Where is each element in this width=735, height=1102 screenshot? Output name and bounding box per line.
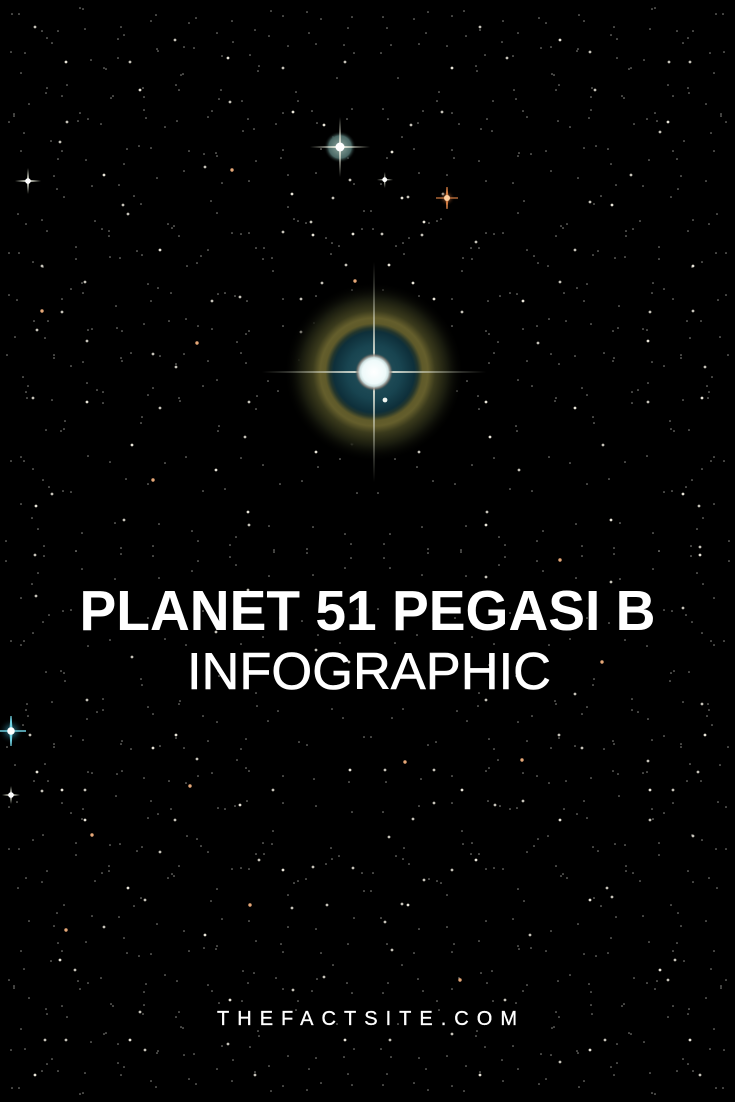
halo ring <box>284 282 464 462</box>
small white star lower left <box>2 786 20 804</box>
subtitle: INFOGRAPHIC <box>187 643 551 701</box>
upper star <box>310 117 370 177</box>
orange star <box>436 187 458 209</box>
star inside halo <box>383 398 387 402</box>
blue star <box>0 716 26 746</box>
title: PLANET 51 PEGASI B <box>80 579 656 643</box>
white star left <box>15 168 41 194</box>
main star: 51 Pegasi <box>262 262 486 482</box>
tinted star field <box>42 170 635 980</box>
diffraction spikes <box>262 262 486 482</box>
footer website: THEFACTSITE.COM <box>217 1008 517 1030</box>
small spiked star <box>377 172 393 188</box>
star core <box>355 353 393 391</box>
